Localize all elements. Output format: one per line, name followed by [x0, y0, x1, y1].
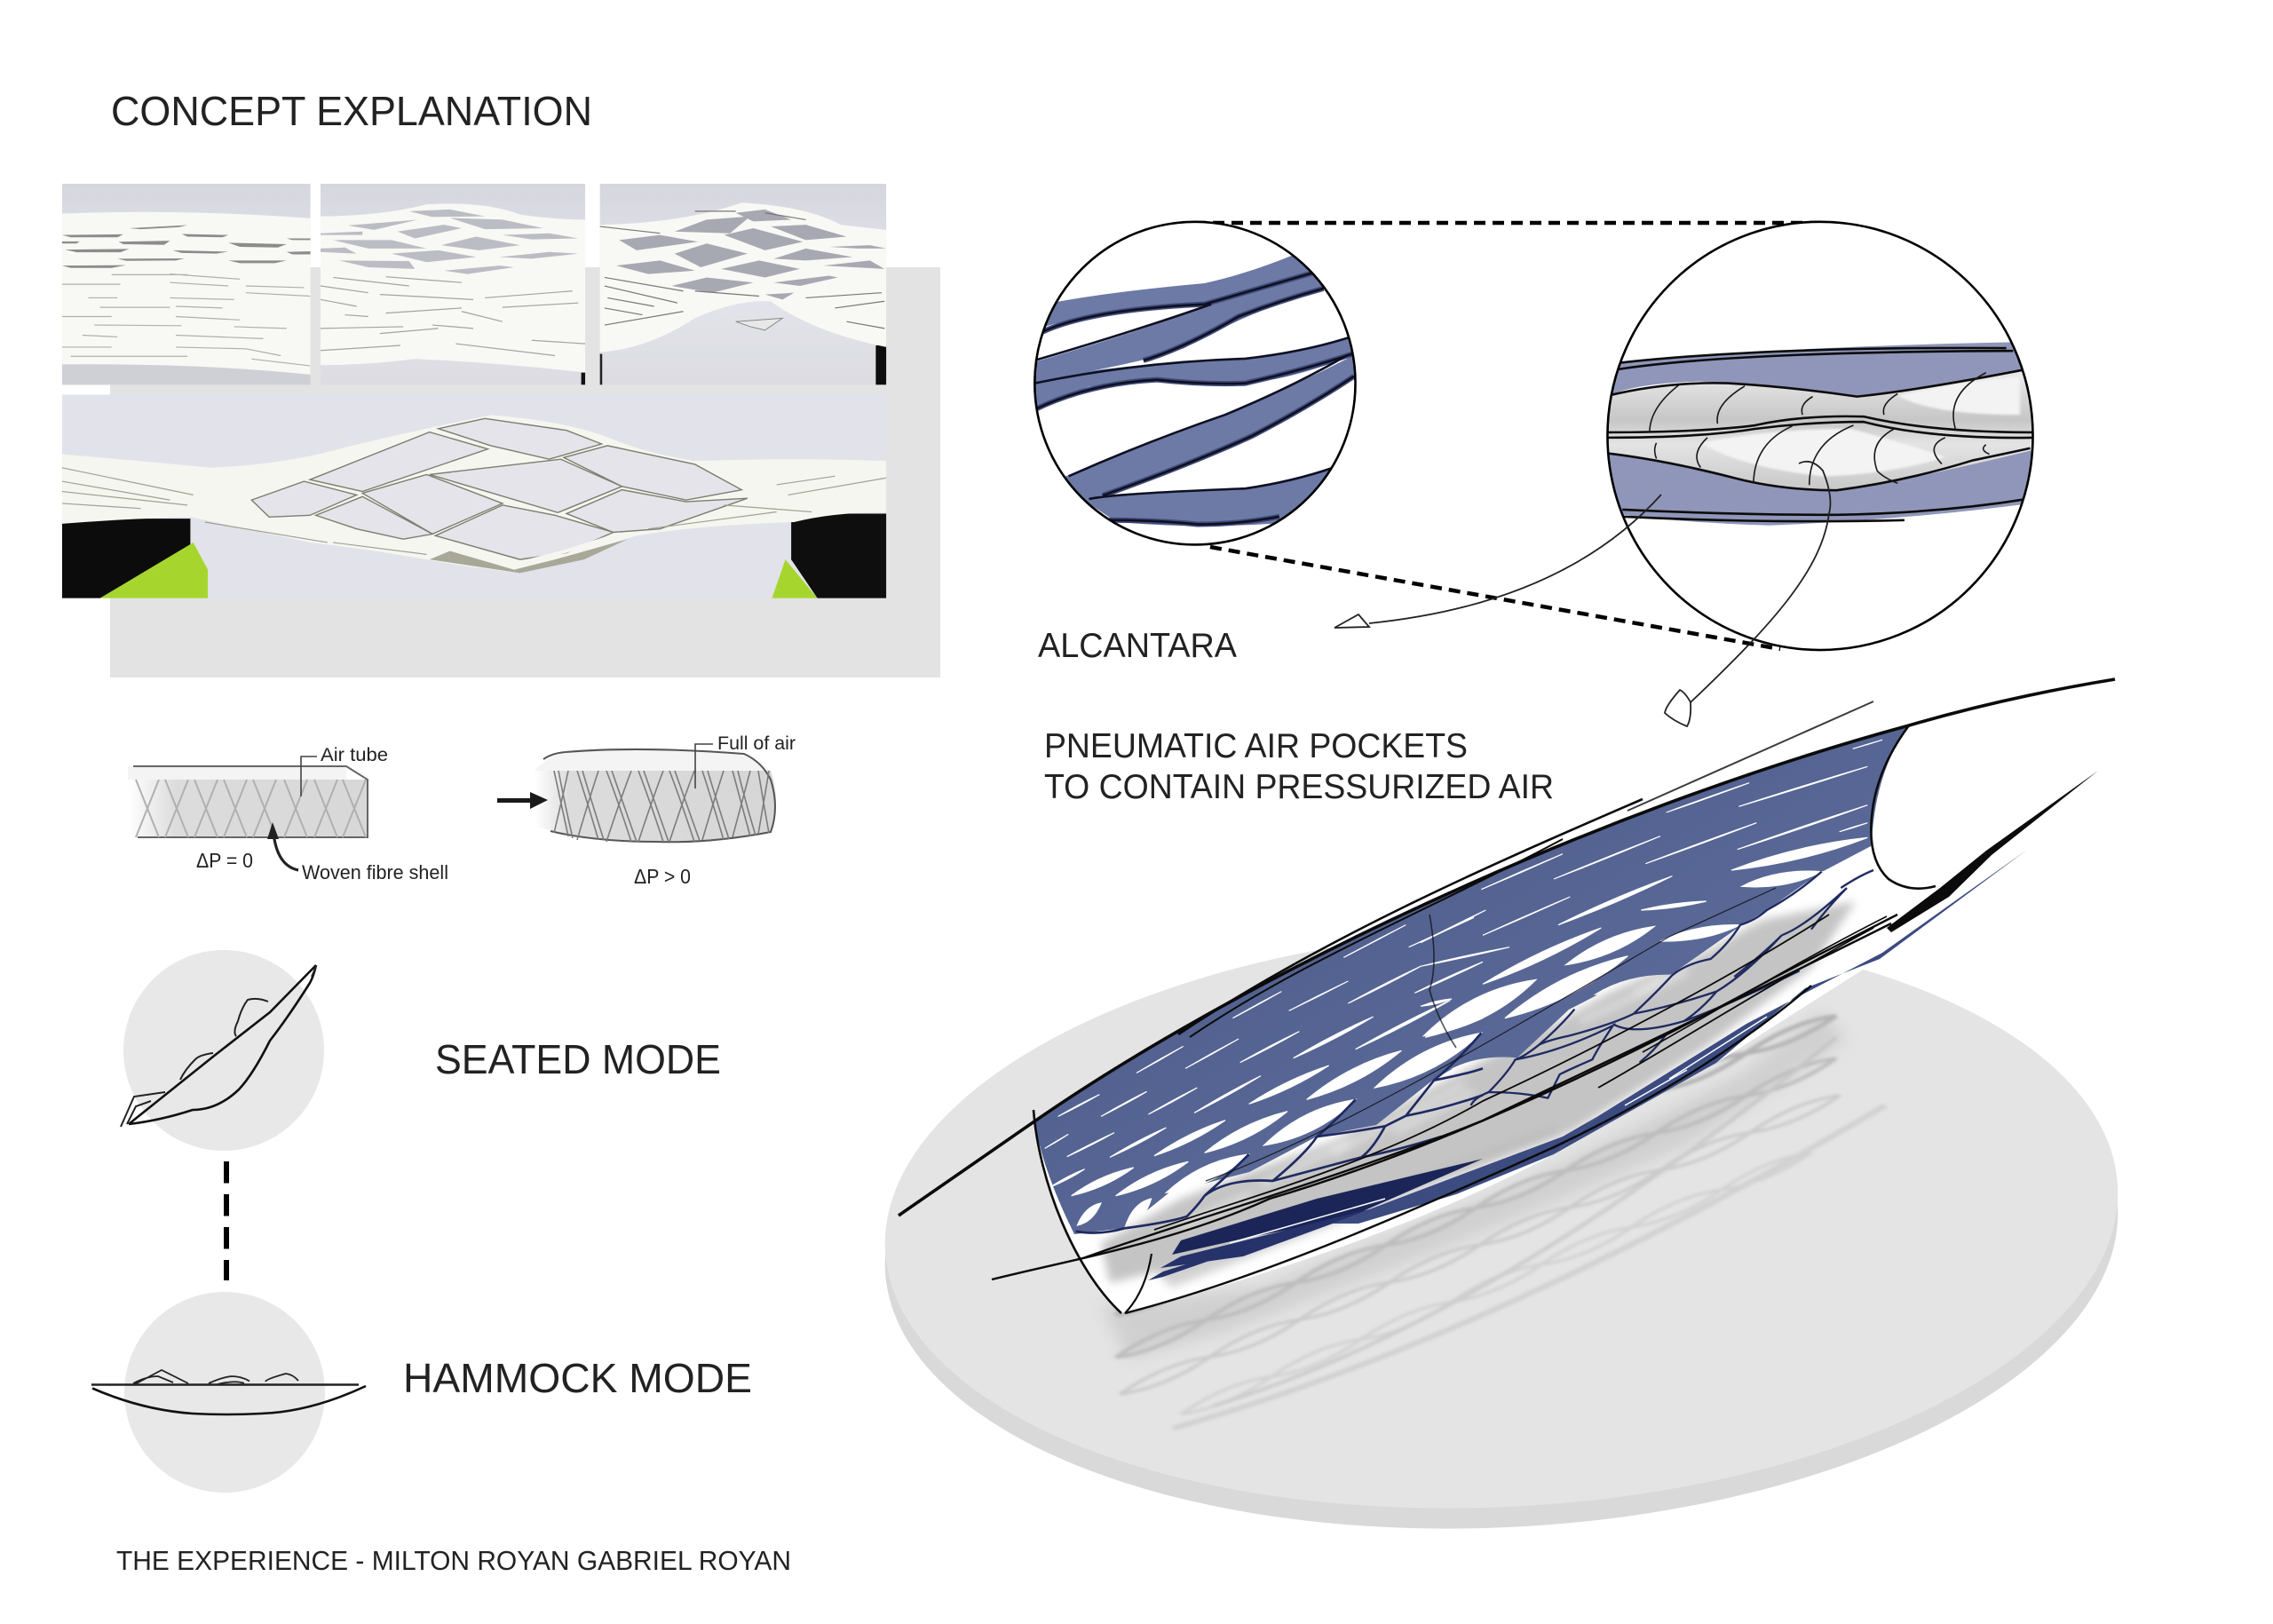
strip outlines — [1034, 273, 1354, 525]
label: air tube: Air tube — [321, 745, 388, 765]
upper alcantara layer — [1605, 342, 2037, 397]
arrow: air pocket pointer — [1665, 462, 1830, 726]
strip shading — [1034, 273, 1354, 525]
label: delta P zero: ΔP = 0 — [196, 849, 253, 872]
platform disc — [870, 898, 2133, 1559]
zoom connector dashes — [1194, 223, 1819, 649]
thick tapered edge stroke — [1887, 771, 2098, 932]
label: woven fibre shell: Woven fibre shell — [302, 861, 448, 883]
title: CONCEPT EXPLANATION — [111, 88, 592, 134]
interior shading — [1101, 901, 1856, 1287]
soft contact shadow under hammock — [1101, 1012, 1847, 1359]
photo: partly opened sheet — [321, 184, 585, 384]
icon: hammock mode — [91, 1292, 366, 1493]
label: full of air: Full of air — [717, 733, 796, 754]
main illustration: hammock mesh — [899, 679, 2115, 1313]
label: pneumatic air pockets: TO CONTAIN PRESSURIZED AIR — [1044, 768, 1554, 806]
lower mesh lines right — [1471, 870, 1873, 1105]
detail circle: air pockets — [1605, 222, 2037, 650]
label: seated mode: SEATED MODE — [435, 1036, 721, 1082]
hands left — [62, 519, 190, 598]
arrow: woven fibre shell pointer — [267, 822, 298, 870]
woven strips — [1028, 255, 1358, 526]
detail circle: alcantara strips — [1028, 222, 1358, 544]
label: hammock mode: HAMMOCK MODE — [403, 1355, 752, 1401]
photo: opened sheet — [600, 184, 886, 384]
arrow: pressure — [497, 792, 548, 809]
hands right — [791, 513, 886, 598]
panel: photo backdrop — [110, 267, 940, 677]
pressurised pockets — [1605, 369, 2037, 490]
connector: dashed line between modes — [224, 1161, 229, 1280]
black contour strokes — [899, 679, 2115, 1313]
pocket ribs — [1650, 373, 1990, 485]
arrow: alcantara pointer — [1334, 495, 1661, 628]
navy woven panel — [1034, 725, 1909, 1234]
navy edge band lower — [1148, 850, 2027, 1280]
net — [62, 415, 886, 573]
lower mesh lines left — [1076, 1033, 1483, 1233]
label: delta P positive: ΔP > 0 — [634, 865, 691, 888]
photo: flat sheet — [62, 184, 311, 384]
label: pneumatic air pockets: PNEUMATIC AIR POCKETS — [1044, 727, 1468, 765]
lower alcantara layer — [1605, 450, 2037, 526]
diagram: inflated air tube — [497, 733, 796, 888]
footer credit: THE EXPERIENCE - MILTON ROYAN GABRIEL ROYAN — [116, 1545, 791, 1576]
photo: inflated sheet — [62, 394, 886, 598]
label: pneumatic air pockets — [1044, 727, 1554, 806]
diagram: uninflated air tube — [128, 745, 448, 883]
shadow of mesh on disc — [1116, 1016, 1885, 1429]
label: alcantara: ALCANTARA — [1038, 627, 1237, 665]
hammock body backing — [1034, 725, 2027, 1313]
ink contours — [1605, 348, 2033, 521]
icon: seated mode — [121, 950, 324, 1151]
